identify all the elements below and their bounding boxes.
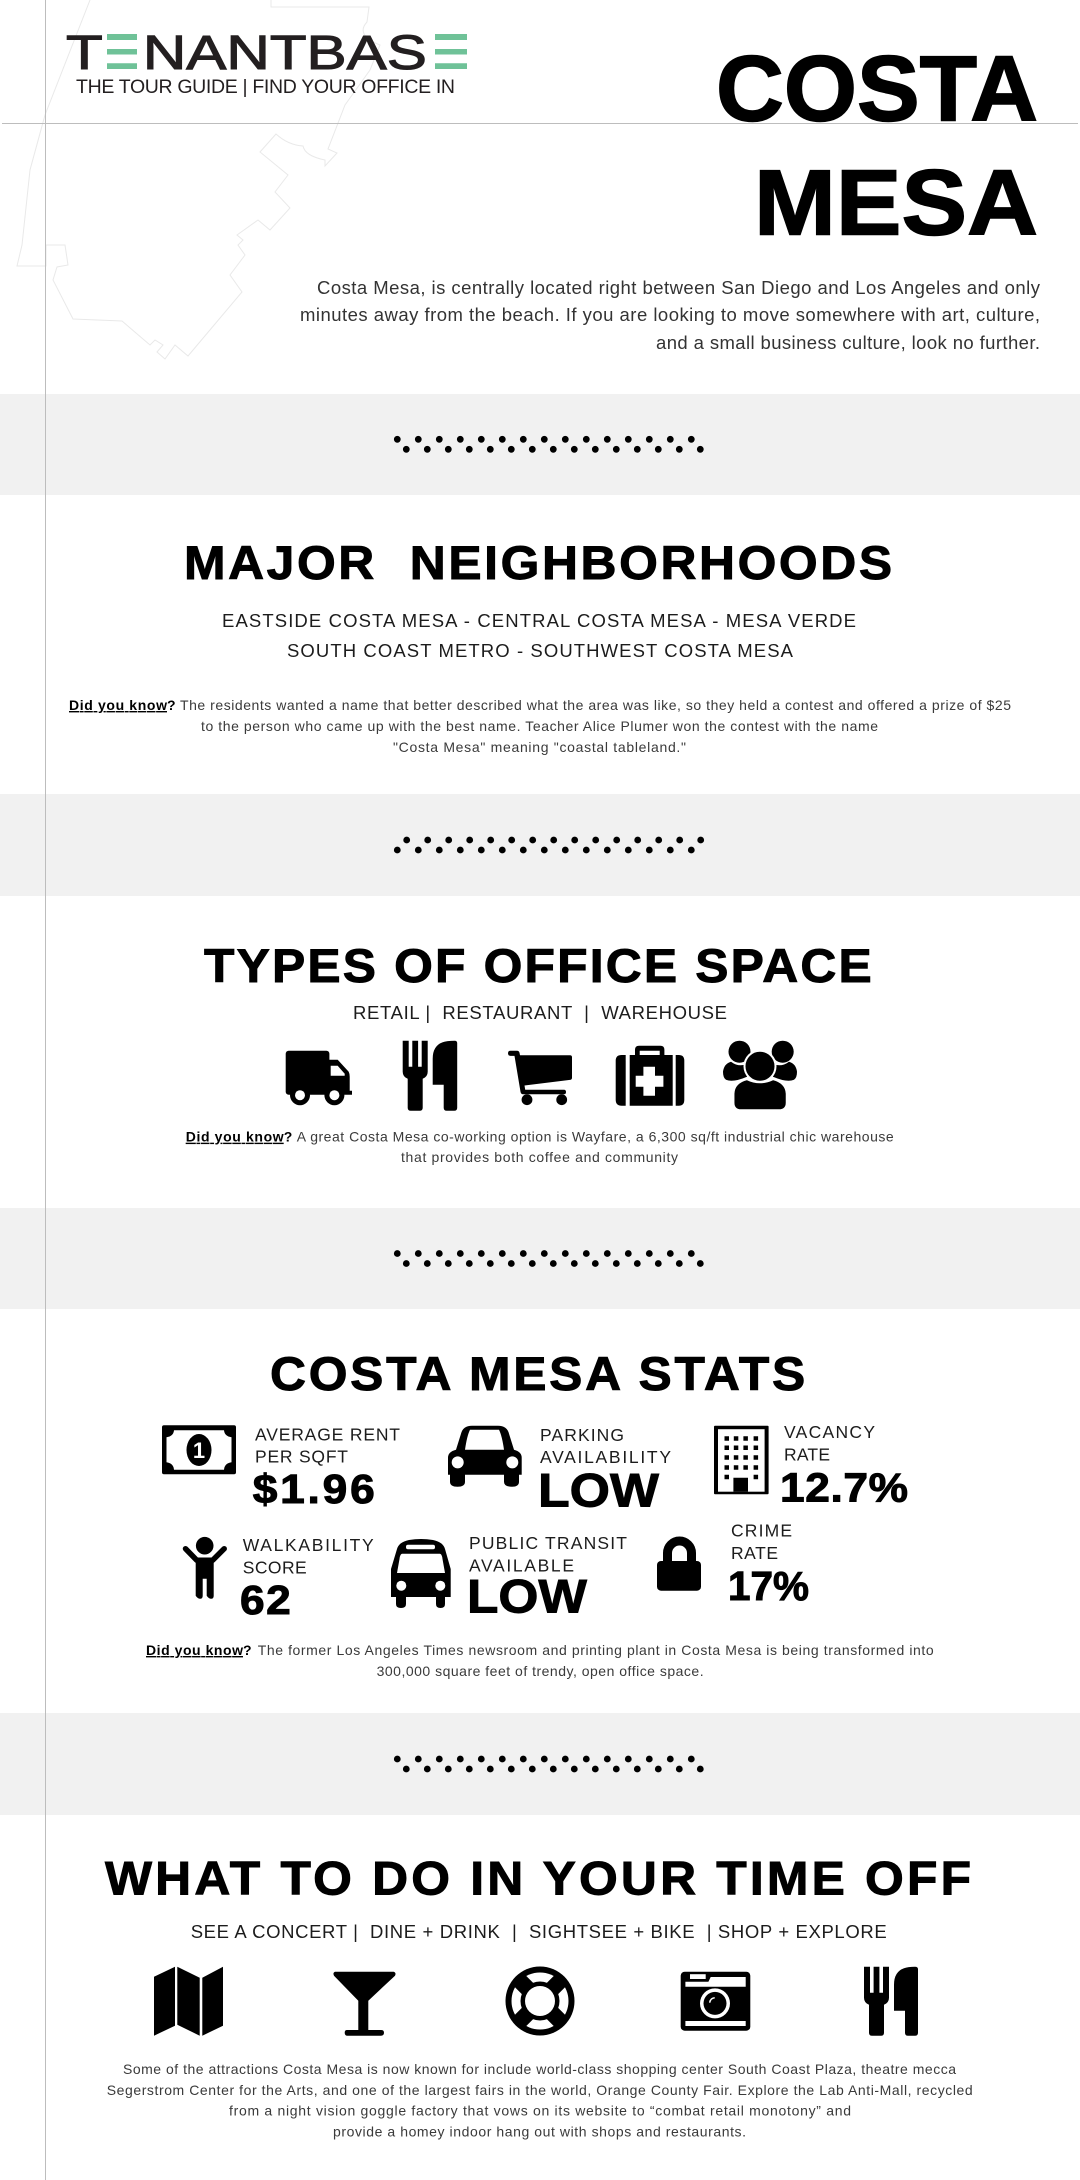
icon: shopping cart [508, 1051, 572, 1105]
stat: parking availability: LOW [538, 1464, 660, 1517]
did you know text: 300,000 square feet of trendy, open office space. [377, 1663, 704, 1679]
icon: dollar bill: 1 [193, 1438, 205, 1463]
stat: walkability score: SCORE [243, 1557, 307, 1577]
icon: office building [714, 1426, 769, 1494]
title: Costa Mesa [716, 36, 1038, 254]
dots divider 3 [397, 1254, 701, 1264]
attractions paragraph [107, 2061, 973, 2140]
heading: TYPES OF OFFICE SPACE [204, 940, 872, 993]
icon: padlock [657, 1541, 701, 1591]
intro text: and a small business culture, look no further. [656, 332, 1040, 353]
did you know text: The residents wanted a name that better described what the area was like, so they held a contest and offered a prize of $25 [180, 697, 1011, 713]
icon: martini glass [333, 1972, 396, 2036]
stat: average rent: PER SQFT [255, 1447, 348, 1467]
stat: walkability score: 62 [240, 1577, 291, 1624]
icon: truck [286, 1051, 352, 1105]
neighborhood list: SOUTH COAST METRO - SOUTHWEST COSTA MESA [287, 640, 794, 661]
title: Costa Mesa: COSTA [716, 36, 1038, 140]
stat: public transit: PUBLIC TRANSIT [469, 1533, 627, 1553]
stat: crime rate [657, 1521, 809, 1609]
stat: public transit: AVAILABLE [469, 1556, 574, 1576]
horizontal header line [2, 122, 1078, 124]
panel: what to do in your time off [105, 1853, 973, 2140]
stat: public transit: LOW [467, 1570, 588, 1623]
tagline: THE TOUR GUIDE | FIND YOUR OFFICE IN [76, 76, 455, 98]
stat: average rent [162, 1425, 400, 1513]
stat: average rent: AVERAGE RENT [255, 1425, 400, 1445]
icon: bus [391, 1539, 451, 1608]
stat: vacancy rate: RATE [784, 1445, 830, 1465]
did you know text: Did you know [186, 1129, 284, 1145]
band: divider 2 [0, 794, 1080, 896]
band: divider 1 [0, 394, 1080, 495]
background map outline of Costa Mesa [17, 0, 380, 359]
did you know text: The former Los Angeles Times newsroom and printing plant in Costa Mesa is being transformed into [258, 1642, 934, 1658]
stat: parking availability: PARKING [540, 1425, 624, 1445]
panel: costa mesa stats [146, 1348, 934, 1679]
icon: life ring [506, 1966, 574, 2036]
did you know text: ? [243, 1642, 252, 1658]
stat: vacancy rate: VACANCY [784, 1422, 875, 1442]
heading: COSTA MESA STATS [270, 1348, 805, 1401]
intro text: minutes away from the beach. If you are looking to move somewhere with art, culture, [300, 304, 1040, 325]
icon: person [186, 1537, 224, 1599]
panel: major neighborhoods [69, 537, 1011, 755]
intro text [300, 277, 1041, 353]
stat: public transit [391, 1533, 627, 1623]
attractions paragraph: provide a homey indoor hang out with shops and restaurants. [333, 2124, 746, 2140]
did you know text: that provides both coffee and community [401, 1149, 678, 1165]
attractions paragraph: Segerstrom Center for the Arts, and one of the largest fairs in the world, Orange County Fair. Explore the Lab Anti-Mall, recycled [107, 2082, 973, 2098]
did you know text: Did you know [69, 697, 167, 713]
icon: group of people [723, 1041, 797, 1110]
stat: crime rate: RATE [731, 1543, 778, 1563]
dots divider 4 [397, 1759, 701, 1769]
vertical guide line [44, 0, 46, 2180]
attractions paragraph: from a night vision goggle factory that vows on its website to “combat retail monotony” and [229, 2103, 851, 2119]
did you know text: Did you know [146, 1642, 243, 1658]
stat: average rent: $1.96 [253, 1466, 375, 1513]
dots divider 1 [397, 439, 701, 449]
did you know text: ? [284, 1129, 292, 1145]
did you know text: to the person who came up with the best name. Teacher Alice Plumer won the contest with the name [201, 718, 878, 734]
did you know text: ? [167, 697, 176, 713]
did you know text [186, 1129, 894, 1165]
heading: WHAT TO DO IN YOUR TIME OFF [105, 1853, 971, 1905]
stat: walkability score [186, 1535, 374, 1624]
band: divider 3 [0, 1208, 1080, 1309]
space types: RETAIL | RESTAURANT | WAREHOUSE [353, 1002, 727, 1023]
logo: Tenantbase: TENANTBAS E [66, 26, 467, 80]
stat: parking availability [448, 1425, 671, 1517]
activities list: SEE A CONCERT | DINE + DRINK | SIGHTSEE + BIKE | SHOP + EXPLORE [191, 1921, 887, 1942]
icon: dollar bill [162, 1425, 236, 1474]
icon: fork and knife [864, 1967, 918, 2036]
did you know text: A great Costa Mesa co-working option is Wayfare, a 6,300 sq/ft industrial chic warehouse [297, 1129, 894, 1145]
neighborhood list [222, 610, 856, 661]
icon: medical kit [616, 1046, 684, 1106]
did you know text [146, 1642, 934, 1679]
stat: crime rate: 17% [728, 1563, 809, 1609]
stat: walkability score: WALKABILITY [243, 1535, 374, 1555]
panel: types of office space [186, 940, 894, 1165]
neighborhood list: EASTSIDE COSTA MESA - CENTRAL COSTA MESA - MESA VERDE [222, 610, 856, 631]
attractions paragraph: Some of the attractions Costa Mesa is now known for include world-class shopping center South Coast Plaza, theatre mecca [123, 2061, 956, 2077]
did you know text [69, 697, 1011, 755]
stat: vacancy rate: 12.7% [780, 1465, 908, 1511]
icon: camera [681, 1972, 750, 2031]
icon: car [448, 1426, 522, 1487]
dots divider 2 [397, 840, 701, 850]
intro text: Costa Mesa, is centrally located right between San Diego and Los Angeles and only [317, 277, 1041, 298]
did you know text: "Costa Mesa" meaning "coastal tableland." [393, 739, 686, 755]
heading: MAJOR NEIGHBORHOODS [184, 537, 892, 590]
band: divider 4 [0, 1713, 1080, 1815]
stat: crime rate: CRIME [731, 1521, 792, 1541]
title: Costa Mesa: MESA [754, 150, 1038, 254]
stat: parking availability: AVAILABILITY [540, 1447, 671, 1467]
icon: folded map [154, 1967, 223, 2036]
icon: fork and knife [403, 1041, 457, 1111]
panel: header [66, 26, 1041, 353]
stat: vacancy rate [714, 1422, 908, 1511]
